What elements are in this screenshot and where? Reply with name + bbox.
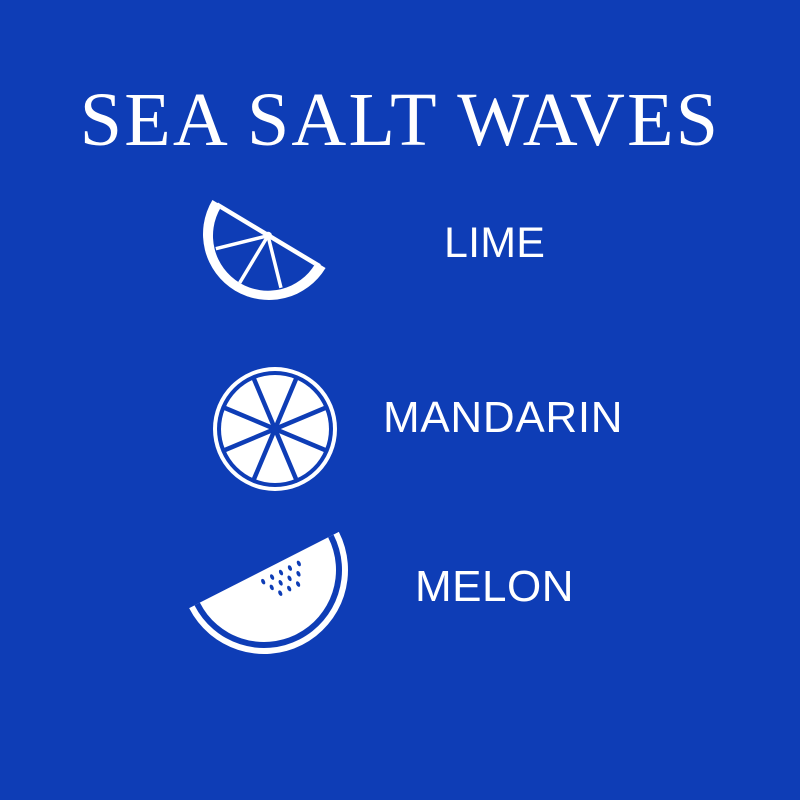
label: melon: MELON: [415, 562, 574, 611]
icon: melon slice: [189, 532, 377, 683]
icon: mandarin slice: [213, 367, 337, 491]
title: SEA SALT WAVES: [80, 78, 720, 162]
label: mandarin: MANDARIN: [383, 393, 623, 442]
label: lime: LIME: [444, 219, 545, 267]
icon: lime slice: [178, 198, 327, 325]
